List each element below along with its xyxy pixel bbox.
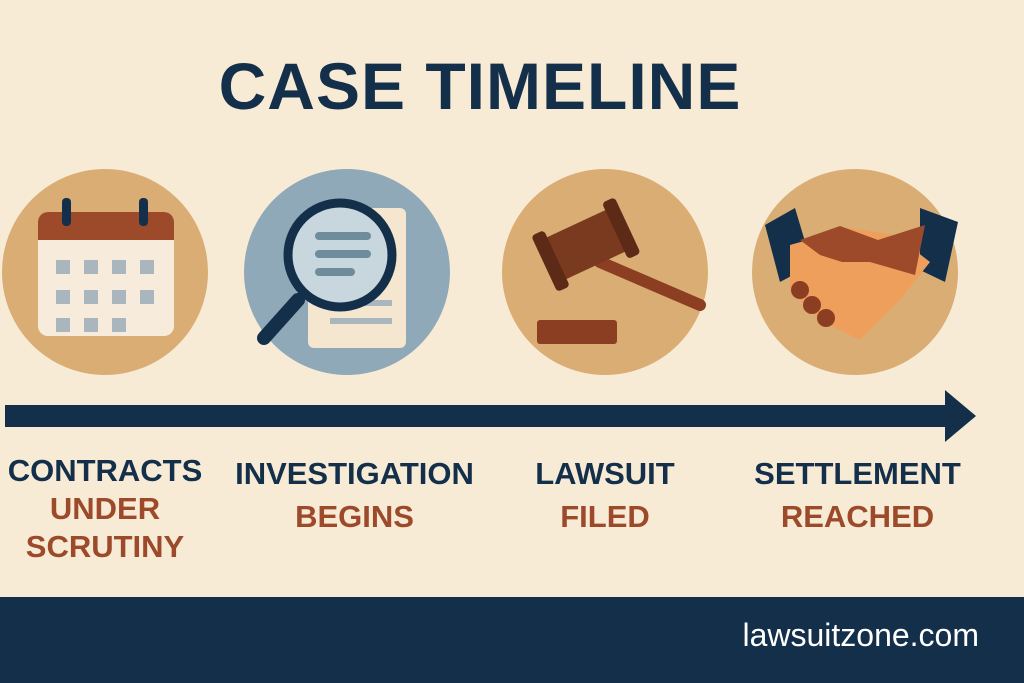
label: lawsuit: FILED <box>560 499 650 534</box>
title: CASE TIMELINE <box>219 49 741 123</box>
footer text: lawsuitzone.com <box>742 617 979 653</box>
arrow <box>5 390 976 442</box>
icon: gavel <box>502 169 708 375</box>
label: settlement: SETTLEMENT <box>754 456 961 491</box>
label: contracts: UNDER <box>50 491 160 526</box>
label: contracts <box>8 453 202 564</box>
label: investigation <box>235 456 474 534</box>
icon: magnifier <box>244 169 450 375</box>
icon: handshake <box>752 169 958 375</box>
footer <box>0 597 1024 683</box>
icon: calendar <box>2 169 208 375</box>
label: lawsuit <box>535 456 675 534</box>
label: investigation: BEGINS <box>295 499 414 534</box>
label: contracts: SCRUTINY <box>26 529 184 564</box>
label: contracts: CONTRACTS <box>8 453 202 488</box>
label: lawsuit: LAWSUIT <box>535 456 675 491</box>
label: investigation: INVESTIGATION <box>235 456 474 491</box>
label: settlement: REACHED <box>781 499 934 534</box>
label: settlement <box>754 456 961 534</box>
